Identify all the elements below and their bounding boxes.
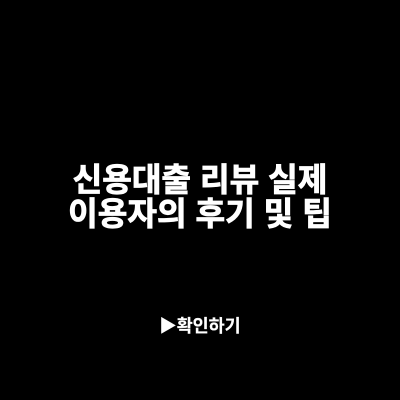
call to action label: ▶확인하기 <box>159 316 241 336</box>
title <box>68 162 332 232</box>
title: 신용대출 리뷰 실제 <box>73 162 327 198</box>
title: 이용자의 후기 및 팁 <box>68 196 332 232</box>
